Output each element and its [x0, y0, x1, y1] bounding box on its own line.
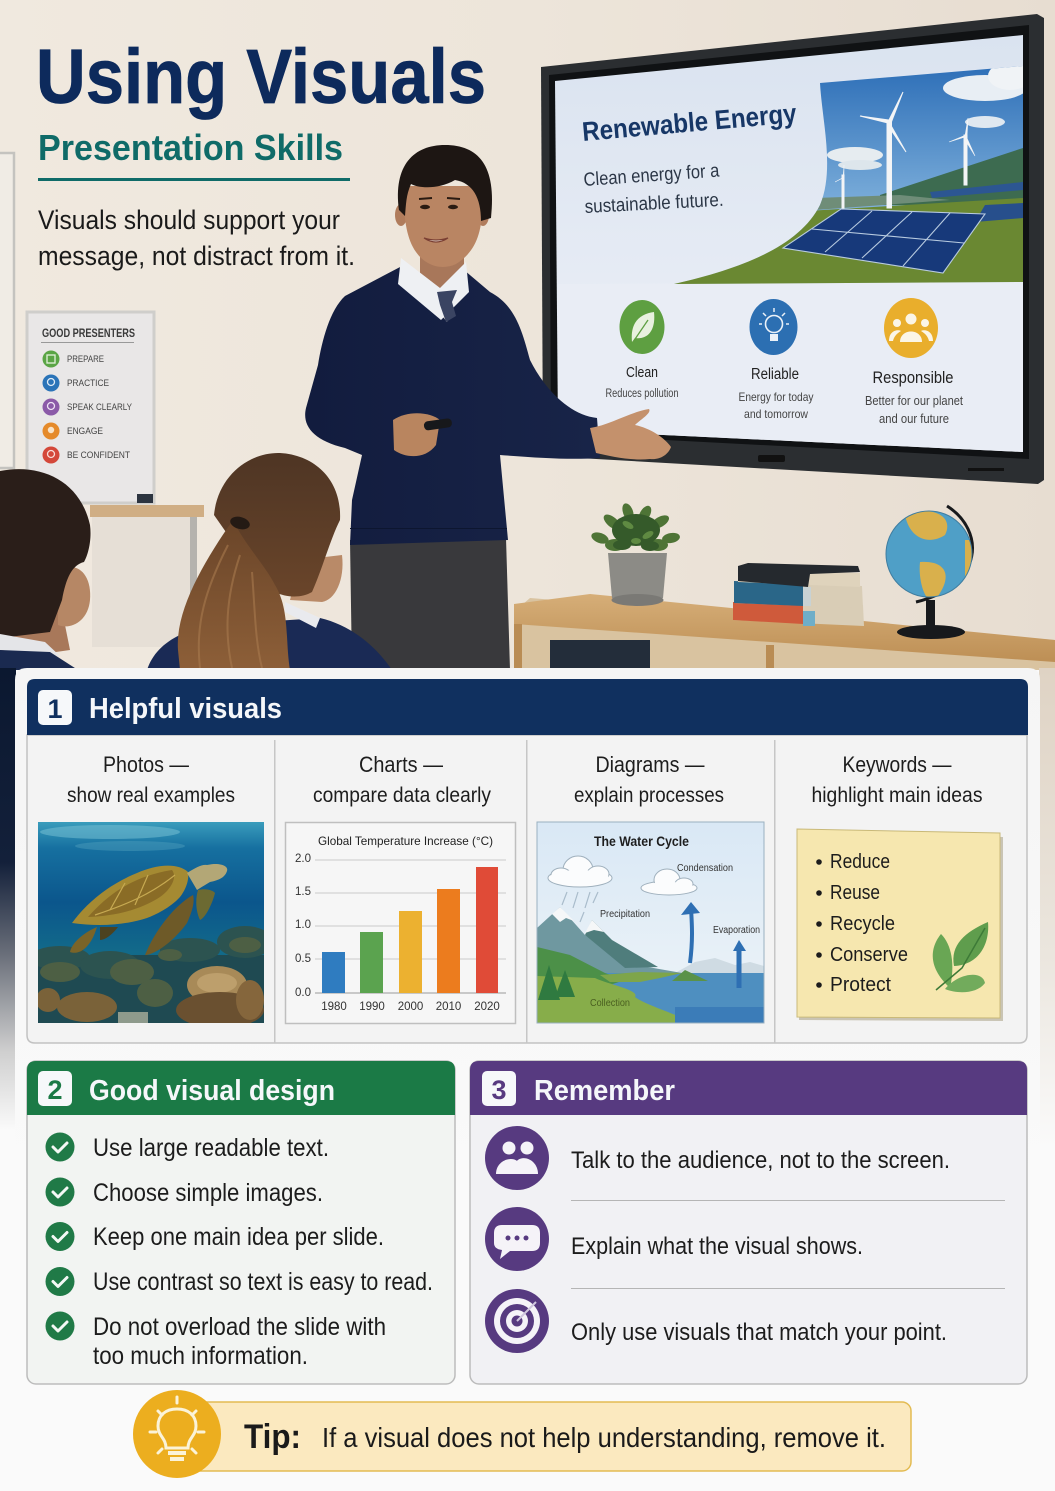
icon: leaves	[933, 922, 988, 992]
slide screen	[555, 35, 1032, 452]
sticky note: Reuse	[830, 882, 880, 904]
label: clean	[606, 364, 678, 400]
icon: group of people	[884, 298, 938, 358]
icon: tip light bulb	[133, 1390, 221, 1478]
bar chart: global temperature: 1980	[321, 1001, 347, 1013]
section 2 header: Good visual design	[89, 1075, 335, 1107]
section 1 header: 1	[47, 694, 63, 724]
label: responsible: Responsible	[872, 369, 954, 387]
checklist: Do not overload the slide with	[93, 1313, 386, 1341]
tip label: Tip:	[244, 1418, 301, 1456]
section 1 body	[27, 735, 1027, 1043]
section 2 header	[27, 1061, 455, 1115]
bar chart: global temperature: 2020	[474, 1001, 500, 1013]
poster: good presenters: PRACTICE	[67, 378, 109, 389]
icon: light bulb	[750, 299, 798, 355]
sticky note	[797, 829, 1003, 1021]
slide title: Renewable Energy	[581, 98, 798, 147]
slide subtitle: sustainable future.	[584, 190, 724, 218]
intro text: Visuals should support your	[38, 205, 340, 235]
section 2: good visual design	[27, 1061, 455, 1384]
checklist: Choose simple images.	[93, 1179, 323, 1207]
trousers	[350, 538, 510, 670]
bar chart: global temperature: 0.0	[295, 987, 311, 999]
checklist: Keep one main idea per slide.	[93, 1223, 384, 1251]
face	[395, 145, 492, 267]
column: keywords: Keywords —	[842, 752, 952, 777]
sticky note: Conserve	[830, 944, 908, 966]
column: diagrams	[537, 752, 764, 1023]
section 2 header: 2	[47, 1075, 63, 1105]
wall background	[0, 0, 1055, 670]
sticky note: Recycle	[830, 913, 895, 935]
column: keywords: highlight main ideas	[812, 784, 982, 807]
bar chart: global temperature: 2.0	[295, 853, 311, 865]
diagram: water cycle: Condensation	[677, 863, 733, 874]
poster: good presenters	[27, 312, 154, 503]
remember item 3: Only use visuals that match your point.	[571, 1319, 947, 1346]
bar chart: global temperature: 1.0	[295, 919, 311, 931]
section 1: helpful visuals	[27, 679, 1028, 1043]
column: photos: show real examples	[67, 784, 235, 807]
label: reliable: and tomorrow	[744, 407, 808, 421]
subtitle underline	[38, 178, 350, 181]
checklist: Use contrast so text is easy to read.	[93, 1268, 433, 1296]
bar chart: global temperature: 1.5	[295, 886, 311, 898]
label: reliable: Energy for today	[738, 390, 814, 404]
icon: target	[485, 1289, 549, 1353]
column: charts: Charts —	[359, 752, 443, 777]
intro text	[38, 205, 355, 271]
seated student: boy	[0, 469, 91, 670]
label: reliable: Reliable	[751, 366, 799, 383]
checklist	[46, 1132, 433, 1370]
wooden shelf with items	[514, 594, 1055, 670]
right fade strip	[1039, 668, 1055, 1148]
section 3: remember	[470, 1061, 1027, 1384]
label: responsible: Better for our planet	[865, 394, 963, 408]
poster: good presenters: SPEAK CLEARLY	[67, 402, 133, 413]
column: charts	[286, 752, 516, 1024]
tip banner	[133, 1390, 911, 1478]
icon: speech bubble	[485, 1207, 549, 1271]
remember item 2: Explain what the visual shows.	[571, 1233, 863, 1260]
title: Using Visuals	[36, 34, 486, 120]
bar chart: global temperature: Global Temperature Increase (°C)	[318, 834, 493, 848]
tie	[437, 290, 457, 322]
slide photo: wind turbines and solar panels	[674, 66, 1023, 284]
intro text: message, not distract from it.	[38, 241, 355, 271]
bar chart: global temperature: 1990	[359, 1001, 385, 1013]
remember item 1: Talk to the audience, not to the screen.	[571, 1147, 950, 1174]
wall monitor	[541, 14, 1044, 484]
label: responsible	[865, 369, 963, 426]
icon: audience	[485, 1126, 549, 1190]
photo: sea turtle	[30, 822, 273, 1028]
bar chart: global temperature: 2000	[398, 1001, 423, 1013]
subtitle: Presentation Skills	[38, 127, 343, 168]
bar chart: global temperature	[286, 822, 516, 1024]
neck	[420, 245, 464, 290]
bar chart: global temperature: 0.5	[295, 953, 311, 965]
column: charts: compare data clearly	[313, 784, 491, 807]
tip text: If a visual does not help understanding, remove it.	[322, 1422, 886, 1453]
sticky note: Reduce	[830, 851, 890, 873]
remote	[423, 418, 452, 431]
poster: good presenters: ENGAGE	[67, 426, 103, 437]
section 3 header	[470, 1061, 1027, 1115]
poster: good presenters: BE CONFIDENT	[67, 450, 130, 461]
label: clean: Reduces pollution	[606, 388, 678, 400]
hand holding remote	[393, 413, 440, 456]
white content panel	[15, 668, 1040, 1491]
stack of books	[733, 563, 864, 626]
whiteboard edge	[0, 153, 14, 468]
small shelf under poster	[90, 505, 204, 647]
column: photos: Photos —	[103, 752, 189, 777]
diagram: water cycle: The Water Cycle	[594, 834, 689, 849]
shirt collar	[398, 258, 469, 320]
sweater	[305, 266, 600, 545]
label: responsible: and our future	[879, 412, 949, 426]
column: photos	[38, 756, 264, 1023]
plant in pot	[590, 502, 681, 606]
section 1 header	[27, 679, 1028, 735]
label: reliable	[738, 366, 814, 421]
section 3 header: 3	[491, 1075, 507, 1105]
diagram: water cycle: Evaporation	[713, 925, 760, 936]
column: diagrams: Diagrams —	[596, 752, 704, 777]
diagram: water cycle: Collection	[590, 998, 630, 1009]
label: clean: Clean	[626, 364, 658, 381]
slide subtitle	[583, 161, 724, 218]
column: diagrams: explain processes	[574, 784, 724, 807]
diagram: water cycle: Precipitation	[600, 909, 650, 920]
slide subtitle: Clean energy for a	[583, 161, 720, 191]
checklist: Use large readable text.	[93, 1134, 329, 1162]
globe	[886, 506, 977, 639]
poster: good presenters: PREPARE	[67, 354, 104, 365]
section 3 header: Remember	[534, 1075, 675, 1107]
left fade strip	[0, 668, 16, 1130]
icon: leaf	[620, 300, 664, 354]
column: keywords	[797, 752, 1003, 1021]
pointing hand	[590, 409, 671, 459]
checklist: too much information.	[93, 1342, 308, 1370]
poster: good presenters: GOOD PRESENTERS	[42, 328, 135, 340]
bar chart: global temperature: 2010	[436, 1001, 461, 1013]
presenter student	[305, 145, 671, 670]
seated student: girl	[147, 453, 392, 670]
section 1 header: Helpful visuals	[89, 693, 282, 725]
diagram: water cycle	[537, 822, 764, 1023]
sticky note: Protect	[830, 974, 891, 996]
